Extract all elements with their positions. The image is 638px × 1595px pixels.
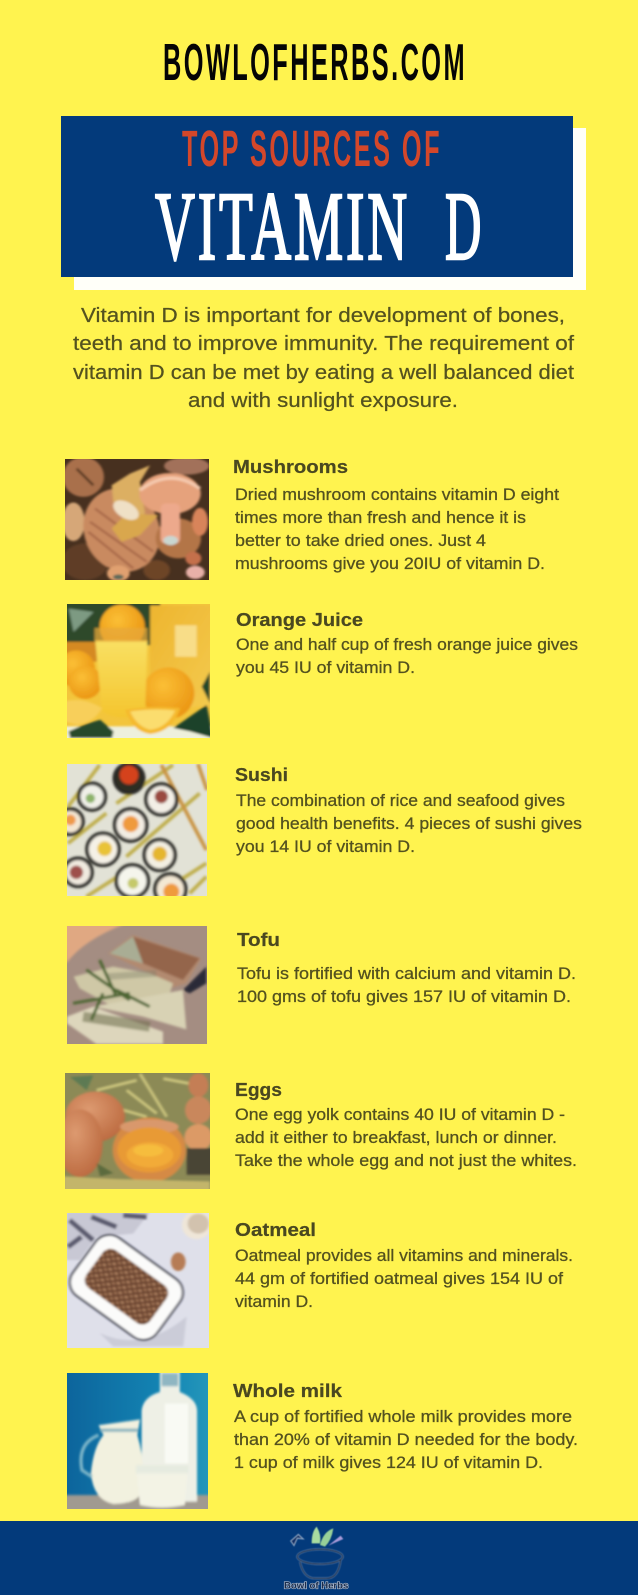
description: eggs: One egg yolk contains 40 IU of vitamin D - bbox=[235, 1106, 565, 1124]
intro paragraph bbox=[73, 305, 574, 412]
photo: eggs bbox=[65, 1073, 210, 1189]
description: orange juice: you 45 IU of vitamin D. bbox=[236, 659, 415, 677]
description: mushrooms: Dried mushroom contains vitamin D eight bbox=[235, 486, 559, 504]
description: sushi: you 14 IU of vitamin D. bbox=[236, 838, 415, 856]
footer band bbox=[0, 1521, 638, 1595]
heading: whole milk: Whole milk bbox=[233, 1381, 343, 1401]
intro paragraph: and with sunlight exposure. bbox=[188, 390, 458, 412]
description: tofu: Tofu is fortified with calcium and vitamin D. bbox=[237, 965, 576, 983]
description: mushrooms: times more than fresh and hence it is bbox=[235, 509, 526, 527]
panel: sushi bbox=[50, 750, 582, 950]
photo: orange juice bbox=[67, 604, 210, 738]
photo: sushi bbox=[67, 764, 207, 896]
title line: vitamin d: D bbox=[445, 173, 484, 281]
panel: tofu bbox=[50, 917, 576, 1117]
title line: vitamin d: VITAMIN bbox=[155, 173, 410, 281]
description: mushrooms: mushrooms give you 20IU of vitamin D. bbox=[235, 555, 545, 573]
description: orange juice: One and half cup of fresh orange juice gives bbox=[236, 636, 578, 654]
description: whole milk: A cup of fortified whole milk provides more bbox=[234, 1408, 572, 1426]
panel: oatmeal bbox=[50, 1194, 573, 1393]
photo: whole milk bbox=[67, 1373, 208, 1509]
description: eggs: Take the whole egg and not just the whites. bbox=[235, 1152, 577, 1170]
banner blue panel bbox=[61, 116, 573, 277]
description: tofu bbox=[237, 965, 576, 1006]
intro paragraph: teeth and to improve immunity. The requirement of bbox=[73, 333, 574, 355]
heading: sushi: Sushi bbox=[235, 765, 288, 785]
description: sushi bbox=[236, 792, 582, 856]
description: oatmeal: Oatmeal provides all vitamins and minerals. bbox=[235, 1247, 573, 1265]
title banner bbox=[61, 116, 586, 290]
description: sushi: The combination of rice and seafood gives bbox=[236, 792, 565, 810]
description: oatmeal bbox=[235, 1247, 573, 1311]
description: eggs bbox=[235, 1106, 577, 1170]
photo: mushrooms bbox=[65, 459, 209, 580]
intro paragraph: vitamin D can be met by eating a well balanced diet bbox=[73, 362, 574, 384]
panel: eggs bbox=[50, 1060, 577, 1259]
description: tofu: 100 gms of tofu gives 157 IU of vitamin D. bbox=[237, 988, 571, 1006]
description: whole milk bbox=[234, 1408, 578, 1472]
description: whole milk: than 20% of vitamin D needed for the body. bbox=[234, 1431, 578, 1449]
photo: oatmeal bbox=[67, 1213, 209, 1348]
heading: eggs: Eggs bbox=[235, 1080, 282, 1100]
description: eggs: add it either to breakfast, lunch or dinner. bbox=[235, 1129, 557, 1147]
description: orange juice bbox=[236, 636, 578, 677]
heading: oatmeal: Oatmeal bbox=[235, 1220, 316, 1240]
logo wordmark: Bowl of Herbs bbox=[284, 1581, 348, 1591]
banner white shadow bbox=[74, 128, 586, 290]
description: mushrooms: better to take dried ones. Just 4 bbox=[235, 532, 486, 550]
heading: mushrooms: Mushrooms bbox=[233, 457, 348, 477]
intro paragraph: Vitamin D is important for development of bones, bbox=[81, 305, 565, 327]
icon: bowl of herbs logo bbox=[284, 1526, 349, 1591]
description: mushrooms bbox=[235, 486, 559, 573]
description: oatmeal: 44 gm of fortified oatmeal gives 154 IU of bbox=[235, 1270, 563, 1288]
heading: orange juice: Orange Juice bbox=[236, 610, 363, 630]
panel: whole milk bbox=[50, 1360, 578, 1560]
description: oatmeal: vitamin D. bbox=[235, 1293, 313, 1311]
panel: mushrooms bbox=[50, 445, 559, 645]
description: whole milk: 1 cup of milk gives 124 IU of vitamin D. bbox=[234, 1454, 543, 1472]
description: sushi: good health benefits. 4 pieces of sushi gives bbox=[236, 815, 582, 833]
heading: tofu: Tofu bbox=[237, 930, 280, 950]
panel: orange juice bbox=[50, 579, 578, 778]
photo: tofu bbox=[67, 926, 207, 1044]
